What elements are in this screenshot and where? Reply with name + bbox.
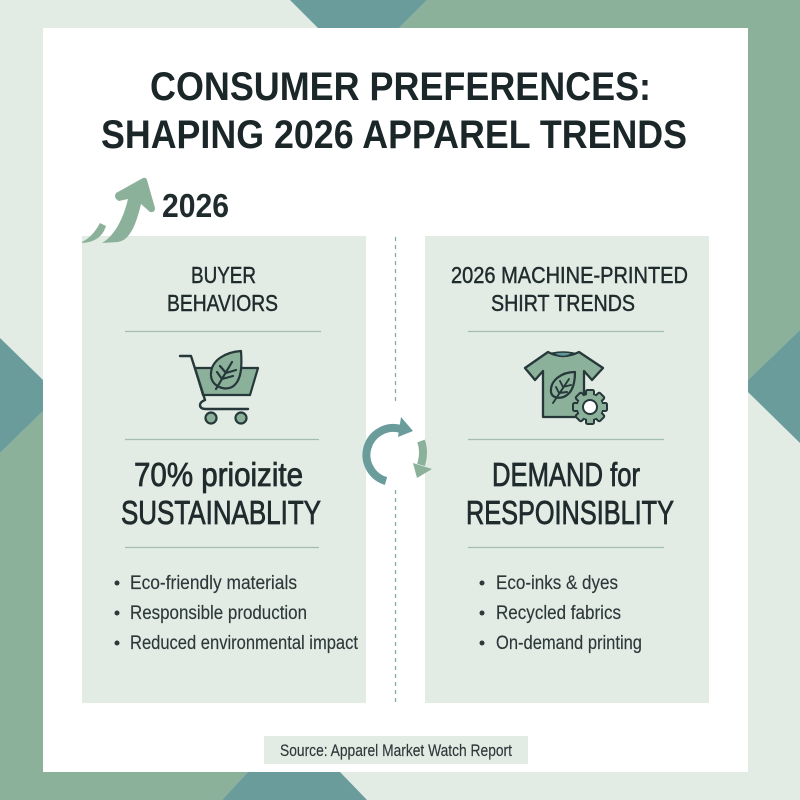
icon: cycle arrows	[366, 417, 432, 481]
panel: machine-printed shirt trends	[425, 236, 709, 703]
panel heading: buyer behaviors	[167, 262, 278, 316]
key statement: demand for responsibility: RESPOINSIBLITY	[466, 494, 674, 531]
bullet list: buyer behaviors: Responsible production	[130, 603, 307, 624]
icon: shopping cart with leaf	[180, 351, 258, 424]
icon: upward growth arrow	[82, 178, 155, 243]
key statement: demand for responsibility: DEMAND for	[492, 456, 640, 493]
bullet list: shirt trends: On-demand printing	[496, 633, 642, 654]
bullet list: shirt trends: Recycled fabrics	[496, 603, 621, 624]
panel heading: shirt trends: SHIRT TRENDS	[491, 290, 635, 316]
year label: 2026	[162, 187, 229, 224]
panel: buyer behaviors	[82, 236, 366, 703]
bullet list: shirt trends: Eco-inks & dyes	[496, 573, 618, 594]
bullet list: buyer behaviors: Eco-friendly materials	[130, 573, 297, 594]
title: CONSUMER PREFERENCES:	[150, 65, 651, 109]
dashed centre line	[394, 237, 396, 702]
key statistic: 70% prioritize sustainability	[121, 456, 321, 531]
source note	[264, 736, 528, 764]
panel heading: shirt trends: 2026 MACHINE-PRINTED	[451, 262, 688, 288]
bullet list: shirt trends	[480, 573, 642, 654]
gear	[573, 390, 607, 424]
panel heading: buyer behaviors: BEHAVIORS	[167, 290, 278, 316]
panel heading: shirt trends	[451, 262, 688, 316]
bullet list: buyer behaviors: Reduced environmental impact	[130, 633, 359, 654]
panel heading: buyer behaviors: BUYER	[191, 262, 256, 288]
bullet list: buyer behaviors	[114, 573, 359, 654]
source note: Source: Apparel Market Watch Report	[280, 741, 512, 760]
key statistic: 70% prioritize sustainability: SUSTAINABLITY	[121, 494, 321, 531]
key statement: demand for responsibility	[466, 456, 674, 531]
title	[101, 65, 687, 157]
icon: t-shirt with leaf and gear	[525, 352, 607, 424]
key statistic: 70% prioritize sustainability: 70% prioizite	[134, 456, 303, 493]
title: SHAPING 2026 APPAREL TRENDS	[101, 113, 687, 157]
